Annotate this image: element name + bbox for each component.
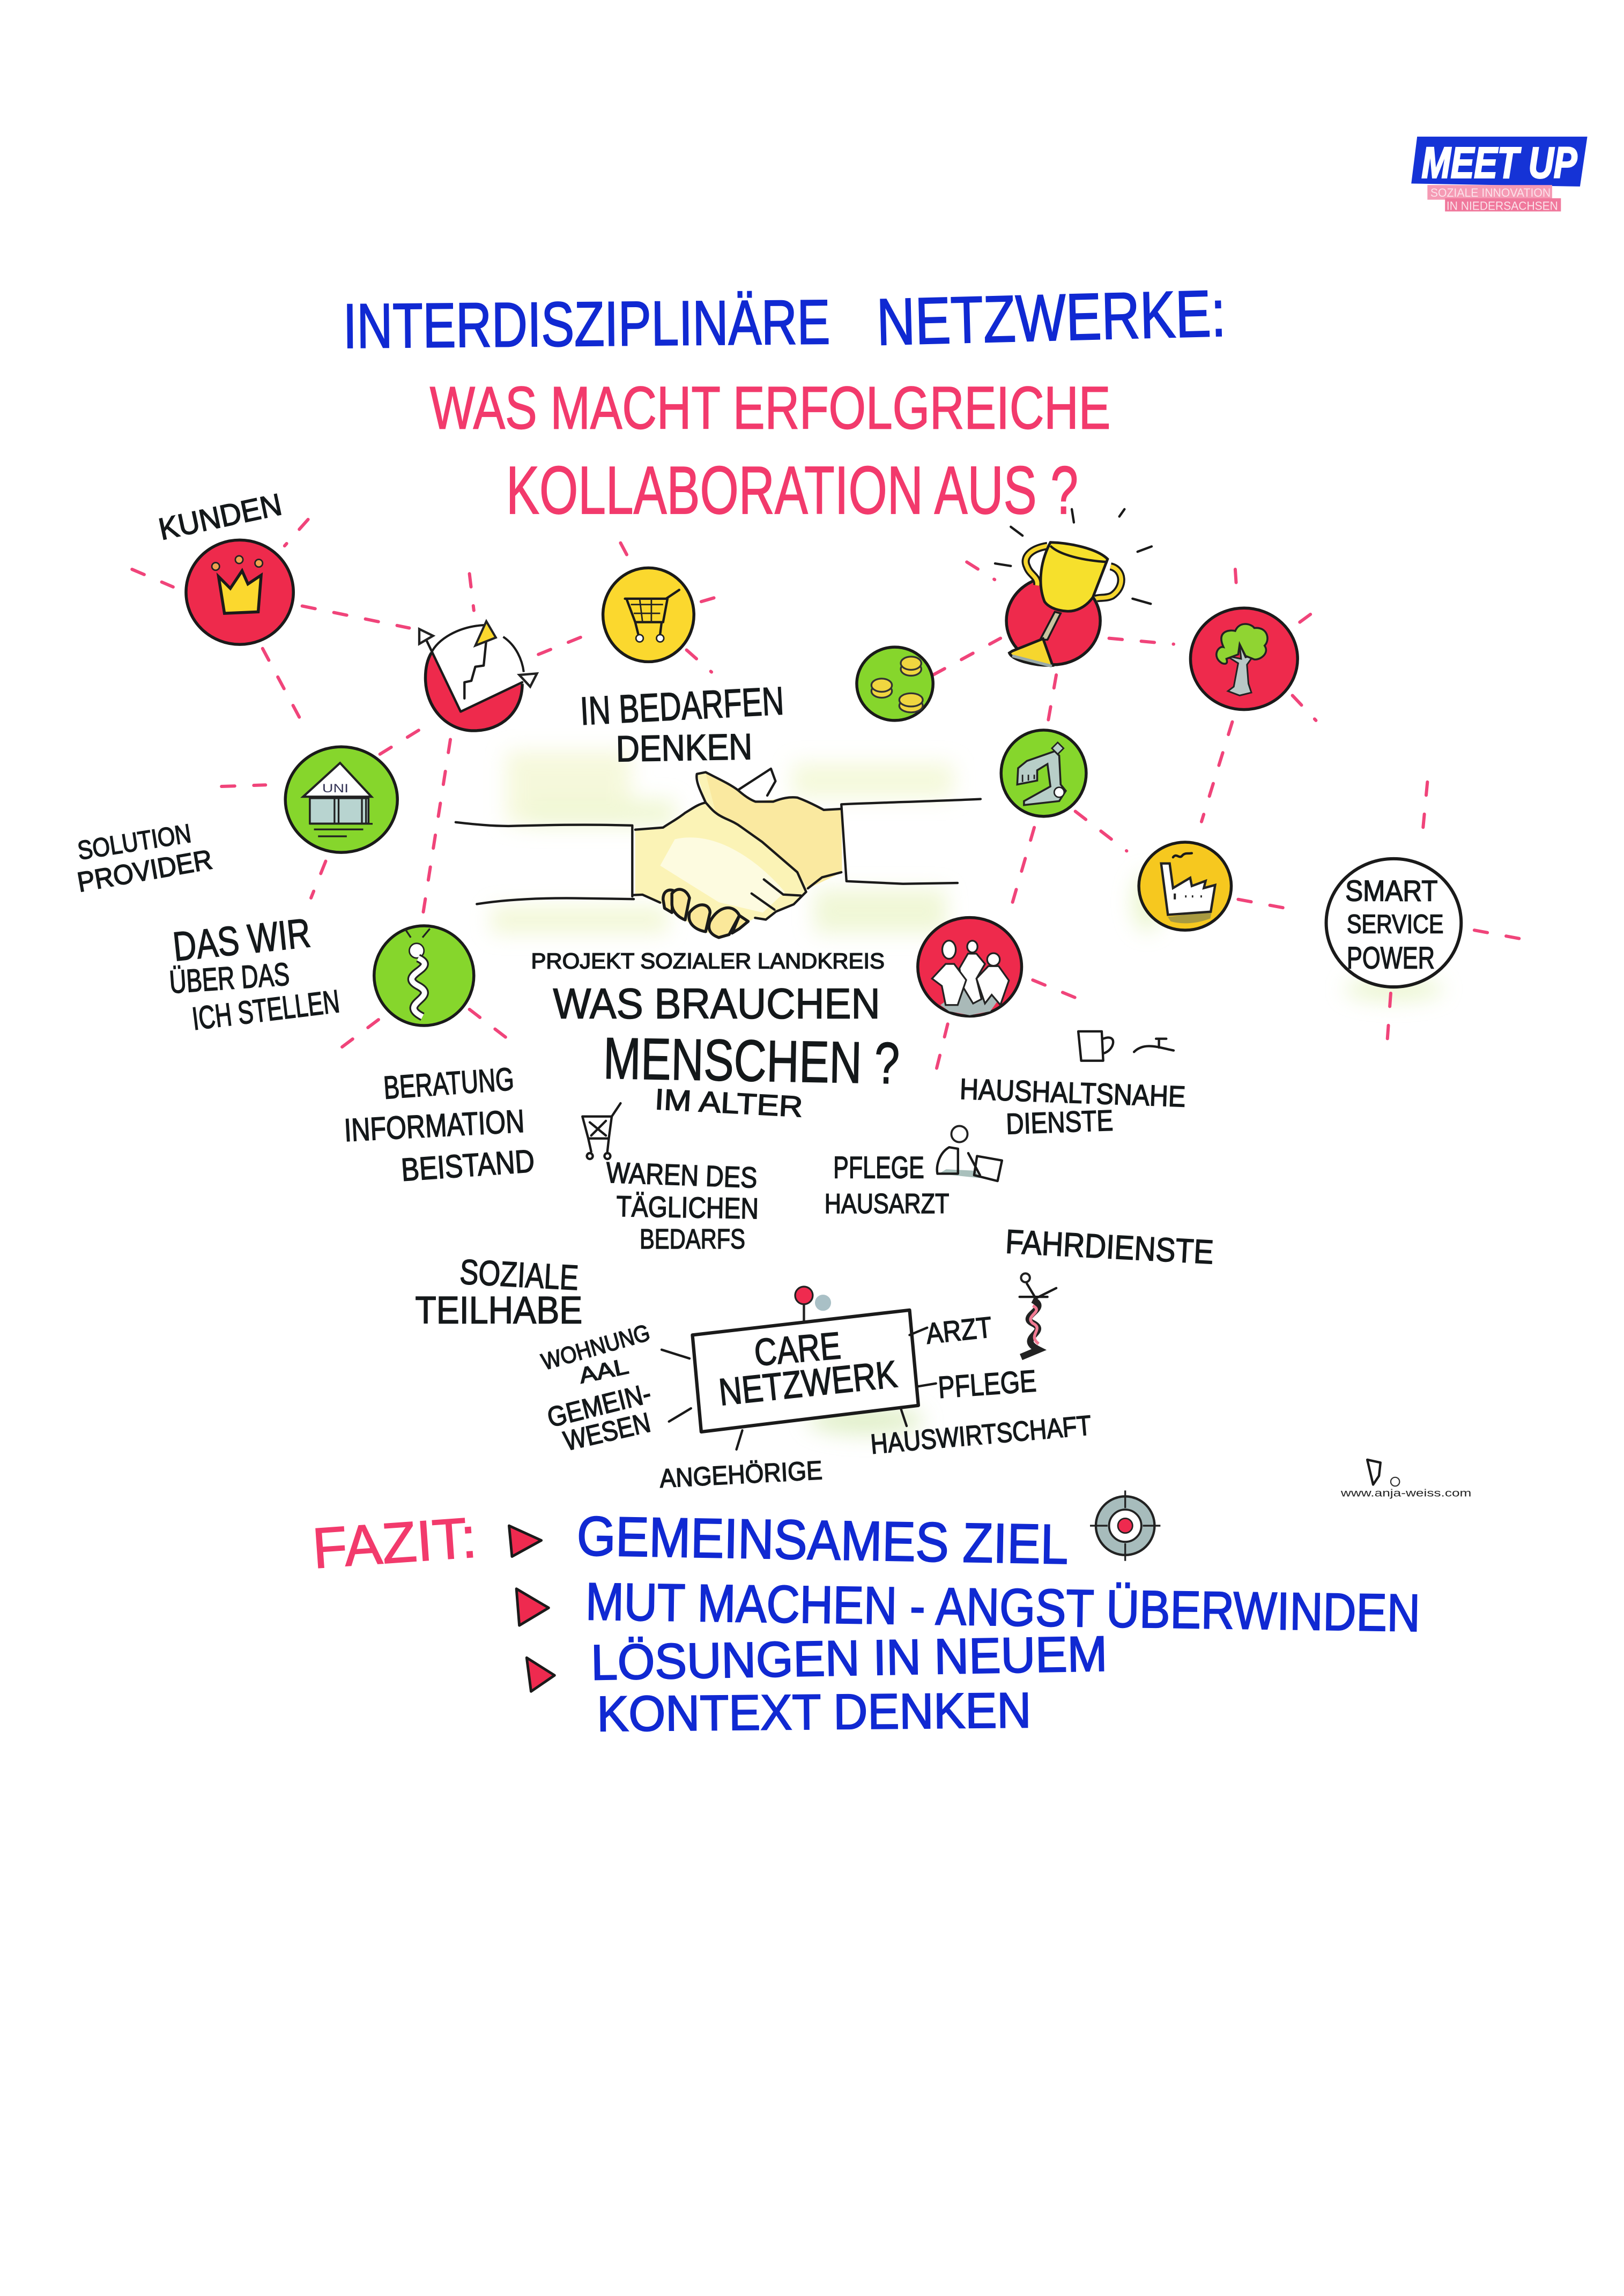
title: WAS MACHT ERFOLGREICHE bbox=[430, 374, 1110, 441]
network labels around Care Netzwerk: AAL bbox=[577, 1354, 631, 1388]
box label bbox=[717, 1325, 899, 1414]
logo: Meet Up: SOZIALE INNOVATION bbox=[1430, 186, 1551, 199]
text: Waren des täglichen Bedarfs: TÄGLICHEN bbox=[616, 1190, 759, 1225]
icon: factory bbox=[1139, 842, 1232, 930]
text: Waren des täglichen Bedarfs: BEDARFS bbox=[640, 1224, 745, 1255]
text: Das Wir über das Ich stellen bbox=[168, 910, 342, 1037]
list: Fazit bullet points bbox=[509, 1490, 1421, 1742]
text: Pflege Hausarzt with doctor icon: PFLEGE bbox=[833, 1151, 924, 1185]
circle: Smart Service Power: SMART bbox=[1345, 874, 1437, 907]
icon: growth arrow bbox=[419, 621, 537, 731]
text: Gemeinsames Ziel: GEMEINSAMES ZIEL bbox=[576, 1505, 1069, 1576]
network labels around Care Netzwerk: WOHNUNG bbox=[538, 1319, 653, 1376]
icon: university: UNI bbox=[322, 782, 348, 795]
title bbox=[343, 277, 1227, 528]
text: Pflege Hausarzt with doctor icon: HAUSARZT bbox=[825, 1188, 949, 1220]
heading: Was brauchen Menschen im Alter: MENSCHEN ? bbox=[603, 1026, 900, 1096]
text: Haushaltsnahe Dienste with icons: DIENSTE bbox=[1005, 1104, 1114, 1140]
text: In Bedarfen denken: IN BEDARFEN bbox=[579, 678, 785, 733]
text: Lösungen in neuem Kontext denken: KONTEXT DENKEN bbox=[597, 1682, 1032, 1742]
circle: Smart Service Power: POWER bbox=[1347, 941, 1435, 975]
icon: people bbox=[918, 918, 1022, 1016]
network labels around Care Netzwerk: WESEN bbox=[561, 1407, 654, 1457]
signature: anja-weiss.com bbox=[1340, 1460, 1471, 1499]
text: Lösungen in neuem Kontext denken bbox=[590, 1626, 1108, 1742]
box label: NETZWERK bbox=[717, 1353, 899, 1414]
text: Das Wir über das Ich stellen: DAS WIR bbox=[171, 910, 313, 970]
logo: Meet Up: IN NIEDERSACHSEN bbox=[1447, 199, 1558, 213]
text: Beratung, Information, Beistand: BEISTAND bbox=[400, 1143, 536, 1188]
spokes bbox=[662, 1328, 936, 1450]
icon: small shopping cart bbox=[582, 1103, 620, 1159]
text: Mut machen: MUT MACHEN - ANGST ÜBERWINDEN bbox=[585, 1572, 1421, 1643]
title: KOLLABORATION AUS ? bbox=[506, 452, 1078, 528]
heading: Was brauchen Menschen im Alter: WAS BRAUCHEN bbox=[553, 979, 880, 1027]
text: Haushaltsnahe Dienste with icons: HAUSHALTSNAHE bbox=[959, 1072, 1186, 1113]
text: Solution Provider: SOLUTION bbox=[76, 819, 193, 866]
circle: Smart Service Power bbox=[1326, 859, 1461, 987]
text: Fahrdienste with staff icon bbox=[1005, 1223, 1214, 1357]
network labels around Care Netzwerk: GEMEIN- bbox=[544, 1378, 654, 1433]
network labels around Care Netzwerk bbox=[538, 1310, 1093, 1493]
network labels around Care Netzwerk: HAUSWIRTSCHAFT bbox=[869, 1410, 1093, 1460]
text: In Bedarfen denken: DENKEN bbox=[616, 726, 753, 770]
bullet 3 bbox=[526, 1658, 554, 1691]
text: Beratung, Information, Beistand: BERATUNG bbox=[382, 1061, 515, 1106]
signature: anja-weiss.com: www.anja-weiss.com bbox=[1340, 1488, 1471, 1499]
bullet 2 bbox=[516, 1589, 548, 1625]
icon: shopping cart on yellow bbox=[603, 568, 694, 662]
text: Haushaltsnahe Dienste with icons bbox=[959, 1031, 1186, 1140]
title: NETZWERKE: bbox=[876, 277, 1227, 359]
colour washes behind the drawings bbox=[492, 751, 1443, 1435]
text: Beratung, Information, Beistand bbox=[343, 1061, 536, 1188]
pin bbox=[795, 1287, 831, 1332]
title: INTERDISZIPLINÄRE bbox=[343, 286, 830, 361]
icon: university bbox=[285, 747, 397, 852]
text: Pflege Hausarzt with doctor icon bbox=[825, 1126, 1002, 1220]
panel: Care Netzwerk bbox=[662, 1287, 936, 1450]
text: Soziale Teilhabe bbox=[415, 1252, 582, 1332]
text: Soziale Teilhabe: SOZIALE bbox=[459, 1252, 580, 1297]
note box bbox=[692, 1310, 918, 1432]
icon: crown (Kunden) bbox=[186, 540, 293, 644]
text: Das Wir über das Ich stellen: ICH STELLEN bbox=[190, 983, 342, 1037]
text: Lösungen in neuem Kontext denken: LÖSUNGEN IN NEUEM bbox=[590, 1626, 1108, 1690]
logo: Meet Up bbox=[1411, 137, 1588, 213]
circle: Smart Service Power: SERVICE bbox=[1347, 910, 1443, 939]
icon: target bbox=[1090, 1490, 1160, 1561]
text: Soziale Teilhabe: TEILHABE bbox=[415, 1289, 582, 1332]
text: Waren des täglichen Bedarfs bbox=[606, 1156, 759, 1255]
icon: staff of Aesculapius on green bbox=[374, 926, 474, 1026]
text: Waren des täglichen Bedarfs: WAREN DES bbox=[606, 1156, 758, 1194]
network labels around Care Netzwerk: PFLEGE bbox=[937, 1364, 1037, 1405]
bullet 1 bbox=[509, 1526, 542, 1557]
icon: tree bbox=[1190, 608, 1297, 710]
logo: Meet Up: MEET UP bbox=[1421, 138, 1577, 187]
heading: Was brauchen Menschen im Alter: PROJEKT SOZIALER LANDKREIS bbox=[531, 948, 885, 973]
network connections bbox=[132, 519, 1538, 1071]
heading: Was brauchen Menschen im Alter: IM ALTER bbox=[654, 1082, 804, 1123]
text: Fahrdienste with staff icon: FAHRDIENSTE bbox=[1005, 1223, 1214, 1271]
label: Kunden: KUNDEN bbox=[155, 487, 285, 547]
text: In Bedarfen denken bbox=[579, 678, 785, 770]
text: Das Wir über das Ich stellen: ÜBER DAS bbox=[168, 956, 291, 1000]
illustration: handshake bbox=[456, 769, 981, 938]
icon: microscope bbox=[1001, 730, 1086, 816]
network labels around Care Netzwerk: ANGEHÖRIGE bbox=[659, 1455, 823, 1493]
text: Solution Provider bbox=[75, 819, 214, 898]
text: Solution Provider: PROVIDER bbox=[75, 844, 214, 898]
box label: CARE bbox=[753, 1325, 842, 1374]
network labels around Care Netzwerk: ARZT bbox=[924, 1310, 993, 1350]
icon: coins on green bbox=[857, 647, 933, 720]
icon: trophy bbox=[995, 509, 1152, 666]
text: Beratung, Information, Beistand: INFORMATION bbox=[343, 1103, 525, 1148]
heading: Was brauchen Menschen im Alter bbox=[531, 948, 900, 1123]
heading: Fazit: FAZIT: bbox=[310, 1505, 479, 1580]
